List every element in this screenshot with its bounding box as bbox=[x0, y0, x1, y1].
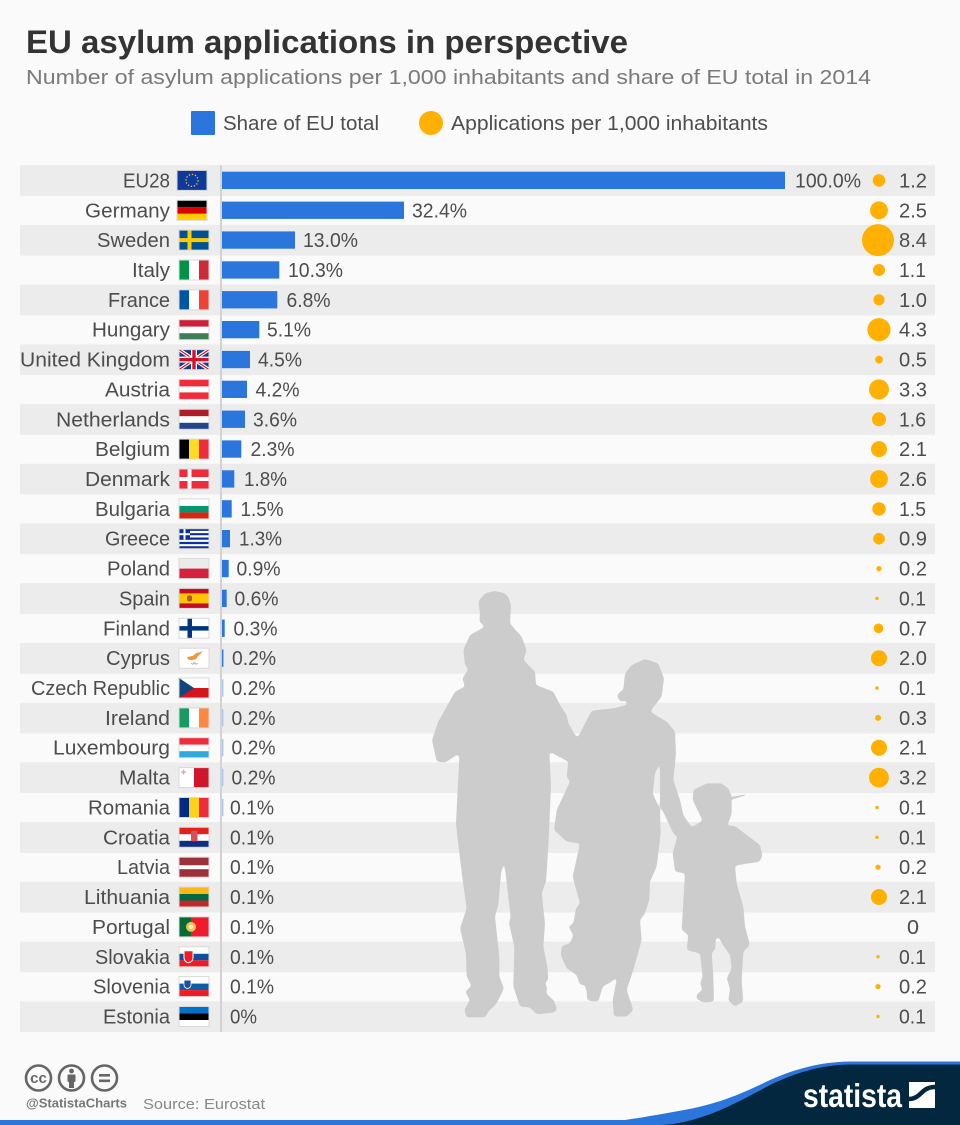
row: Finland: 0.7 bbox=[899, 618, 927, 640]
row: Sweden: Sweden bbox=[97, 230, 170, 252]
row: Bulgaria: Bulgaria bbox=[95, 499, 171, 521]
row: Denmark: 1.8% bbox=[244, 469, 287, 491]
row: EU28: 100.0% bbox=[795, 170, 861, 192]
row: Czech Republic: 0.2% bbox=[232, 678, 276, 700]
row: Slovakia: Slovakia bbox=[95, 947, 171, 969]
row: Sweden bbox=[20, 224, 935, 256]
row: Belgium bbox=[95, 439, 927, 461]
row: Latvia: Latvia bbox=[117, 857, 171, 879]
row: Hungary bbox=[92, 318, 927, 342]
title: EU asylum applications in perspective bbox=[26, 24, 628, 60]
row: Croatia: 0.1 bbox=[899, 827, 926, 849]
row: Spain: Spain bbox=[119, 588, 170, 610]
icon: creative commons licence bbox=[26, 1066, 117, 1090]
row: Slovakia bbox=[20, 942, 935, 972]
row: Lithuania: 0.1% bbox=[230, 887, 274, 909]
row: Hungary: 4.3 bbox=[899, 320, 927, 342]
silhouette: cap brim bbox=[730, 795, 745, 799]
row: Ireland: Ireland bbox=[105, 708, 170, 730]
silhouette: woman and boy bbox=[554, 659, 762, 1017]
row: Estonia bbox=[20, 1001, 935, 1032]
row: United Kingdom bbox=[20, 344, 935, 375]
row: Luxembourg: Luxembourg bbox=[53, 738, 170, 760]
row: United Kingdom: United Kingdom bbox=[20, 350, 170, 372]
row: Lithuania: Lithuania bbox=[84, 887, 171, 909]
row: Slovakia: 0.1% bbox=[230, 947, 274, 969]
row: Belgium: Belgium bbox=[95, 439, 170, 461]
row: Malta: 0.2% bbox=[232, 768, 276, 790]
row: Greece: Greece bbox=[105, 529, 170, 551]
row: Luxembourg: 0.2% bbox=[232, 738, 276, 760]
row: Croatia bbox=[20, 822, 935, 853]
row: Italy: Italy bbox=[132, 260, 170, 282]
row: Malta: 3.2 bbox=[899, 768, 927, 790]
row: Hungary: Hungary bbox=[92, 320, 170, 342]
row: Poland: 0.9% bbox=[236, 559, 281, 581]
row: Austria bbox=[105, 379, 927, 401]
row: Portugal: 0.1% bbox=[230, 917, 274, 939]
row: Romania: 0.1% bbox=[230, 798, 274, 820]
row: Czech Republic: Czech Republic bbox=[31, 678, 170, 700]
statista charts handle: @StatistaCharts bbox=[26, 1096, 127, 1110]
row: Romania bbox=[88, 798, 926, 820]
row: Sweden: 8.4 bbox=[899, 230, 927, 252]
row: Portugal bbox=[92, 917, 919, 939]
row: Cyprus: Cyprus bbox=[106, 648, 170, 670]
row: Finland: Finland bbox=[103, 618, 170, 640]
row: Netherlands bbox=[20, 404, 935, 435]
row: Cyprus bbox=[20, 643, 935, 674]
row: Czech Republic: 0.1 bbox=[899, 678, 926, 700]
row: Latvia: 0.1% bbox=[230, 857, 274, 879]
row: Germany bbox=[85, 200, 927, 222]
row: Slovenia: 0.1% bbox=[230, 977, 274, 999]
row: Malta bbox=[20, 762, 935, 793]
legend: Applications per 1,000 inhabitants bbox=[451, 113, 768, 135]
row: Slovenia: 0.2 bbox=[899, 977, 927, 999]
row: Slovenia: Slovenia bbox=[93, 977, 171, 999]
axis line bbox=[220, 165, 222, 1032]
row: Poland: 0.2 bbox=[899, 559, 927, 581]
row: Netherlands: Netherlands bbox=[56, 409, 170, 431]
footer: blue base strip bbox=[0, 1120, 960, 1125]
source: Source: Eurostat bbox=[143, 1096, 266, 1113]
row: Czech Republic bbox=[31, 678, 926, 700]
row: Poland: Poland bbox=[107, 559, 170, 581]
row: Croatia: Croatia bbox=[103, 827, 171, 849]
chart bbox=[20, 165, 935, 1032]
row: Slovakia: 0.1 bbox=[899, 947, 926, 969]
row: Belgium: 2.1 bbox=[899, 439, 927, 461]
row: Austria: 4.2% bbox=[256, 379, 300, 401]
row: Portugal: 0 bbox=[907, 917, 919, 939]
row: Spain: 0.6% bbox=[234, 588, 279, 610]
row: Estonia: 0% bbox=[230, 1006, 257, 1028]
row: Germany: 32.4% bbox=[412, 200, 467, 222]
statista logo: statista bbox=[803, 1077, 903, 1114]
row: Bulgaria: 1.5 bbox=[899, 499, 926, 521]
row: Bulgaria: 1.5% bbox=[240, 499, 284, 521]
row: Finland: 0.3% bbox=[234, 618, 278, 640]
row: United Kingdom: 4.5% bbox=[258, 350, 302, 372]
icon: creative commons licence: cc bbox=[30, 1070, 47, 1087]
silhouette: man carrying child bbox=[432, 591, 580, 1017]
row: Estonia: 0.1 bbox=[899, 1006, 926, 1028]
row: Denmark: Denmark bbox=[85, 469, 171, 491]
row: Luxembourg bbox=[53, 738, 927, 760]
row: Poland bbox=[107, 559, 927, 581]
row: Cyprus: 0.2% bbox=[232, 648, 276, 670]
row: Hungary: 5.1% bbox=[267, 320, 311, 342]
row: France: 1.0 bbox=[899, 290, 927, 312]
row: Spain bbox=[20, 583, 935, 614]
row: Austria: 3.3 bbox=[899, 379, 927, 401]
row: Romania: Romania bbox=[88, 798, 171, 820]
row: Germany: 2.5 bbox=[899, 200, 927, 222]
row: Greece: 0.9 bbox=[899, 529, 927, 551]
row: EU28: 1.2 bbox=[899, 170, 927, 192]
row: Italy: 10.3% bbox=[288, 260, 343, 282]
row: Lithuania: 2.1 bbox=[899, 887, 927, 909]
legend bbox=[191, 111, 768, 135]
row: Romania: 0.1 bbox=[899, 798, 926, 820]
row: France: 6.8% bbox=[286, 290, 331, 312]
row: Denmark: 2.6 bbox=[899, 469, 927, 491]
row: Croatia: 0.1% bbox=[230, 827, 274, 849]
row: Italy bbox=[132, 260, 926, 282]
row: Estonia: Estonia bbox=[103, 1006, 171, 1028]
legend: Share of EU total bbox=[223, 113, 379, 135]
row: Germany: Germany bbox=[85, 200, 170, 222]
row: Ireland bbox=[20, 703, 935, 733]
row: Italy: 1.1 bbox=[899, 260, 926, 282]
row: Spain: 0.1 bbox=[899, 588, 926, 610]
row: Austria: Austria bbox=[105, 379, 171, 401]
row: Cyprus: 2.0 bbox=[899, 648, 927, 670]
row: Luxembourg: 2.1 bbox=[899, 738, 927, 760]
row: Greece bbox=[20, 524, 935, 554]
row: France bbox=[20, 285, 935, 315]
row: Denmark bbox=[20, 464, 935, 494]
row: France: France bbox=[108, 290, 170, 312]
row: Ireland: 0.3 bbox=[899, 708, 927, 730]
silhouette: family bbox=[432, 591, 762, 1017]
row: Lithuania bbox=[20, 882, 935, 912]
row: Ireland: 0.2% bbox=[232, 708, 276, 730]
footer: statista wave bbox=[625, 1062, 960, 1125]
row: Netherlands: 1.6 bbox=[899, 409, 926, 431]
row: Finland bbox=[103, 618, 927, 640]
row: United Kingdom: 0.5 bbox=[899, 350, 927, 372]
row: Portugal: Portugal bbox=[92, 917, 170, 939]
row: Netherlands: 3.6% bbox=[253, 409, 297, 431]
subtitle: Number of asylum applications per 1,000 inhabitants and share of EU total in 2014 bbox=[26, 66, 871, 89]
row: Slovenia bbox=[93, 977, 927, 999]
row: EU28 bbox=[20, 165, 935, 196]
row: Latvia bbox=[117, 857, 927, 879]
row: EU28: EU28 bbox=[123, 170, 170, 192]
row: Sweden: 13.0% bbox=[303, 230, 358, 252]
row: Latvia: 0.2 bbox=[899, 857, 927, 879]
row: Belgium: 2.3% bbox=[250, 439, 295, 461]
row: Malta: Malta bbox=[119, 768, 171, 790]
row: Bulgaria bbox=[95, 499, 926, 521]
row: Greece: 1.3% bbox=[239, 529, 282, 551]
